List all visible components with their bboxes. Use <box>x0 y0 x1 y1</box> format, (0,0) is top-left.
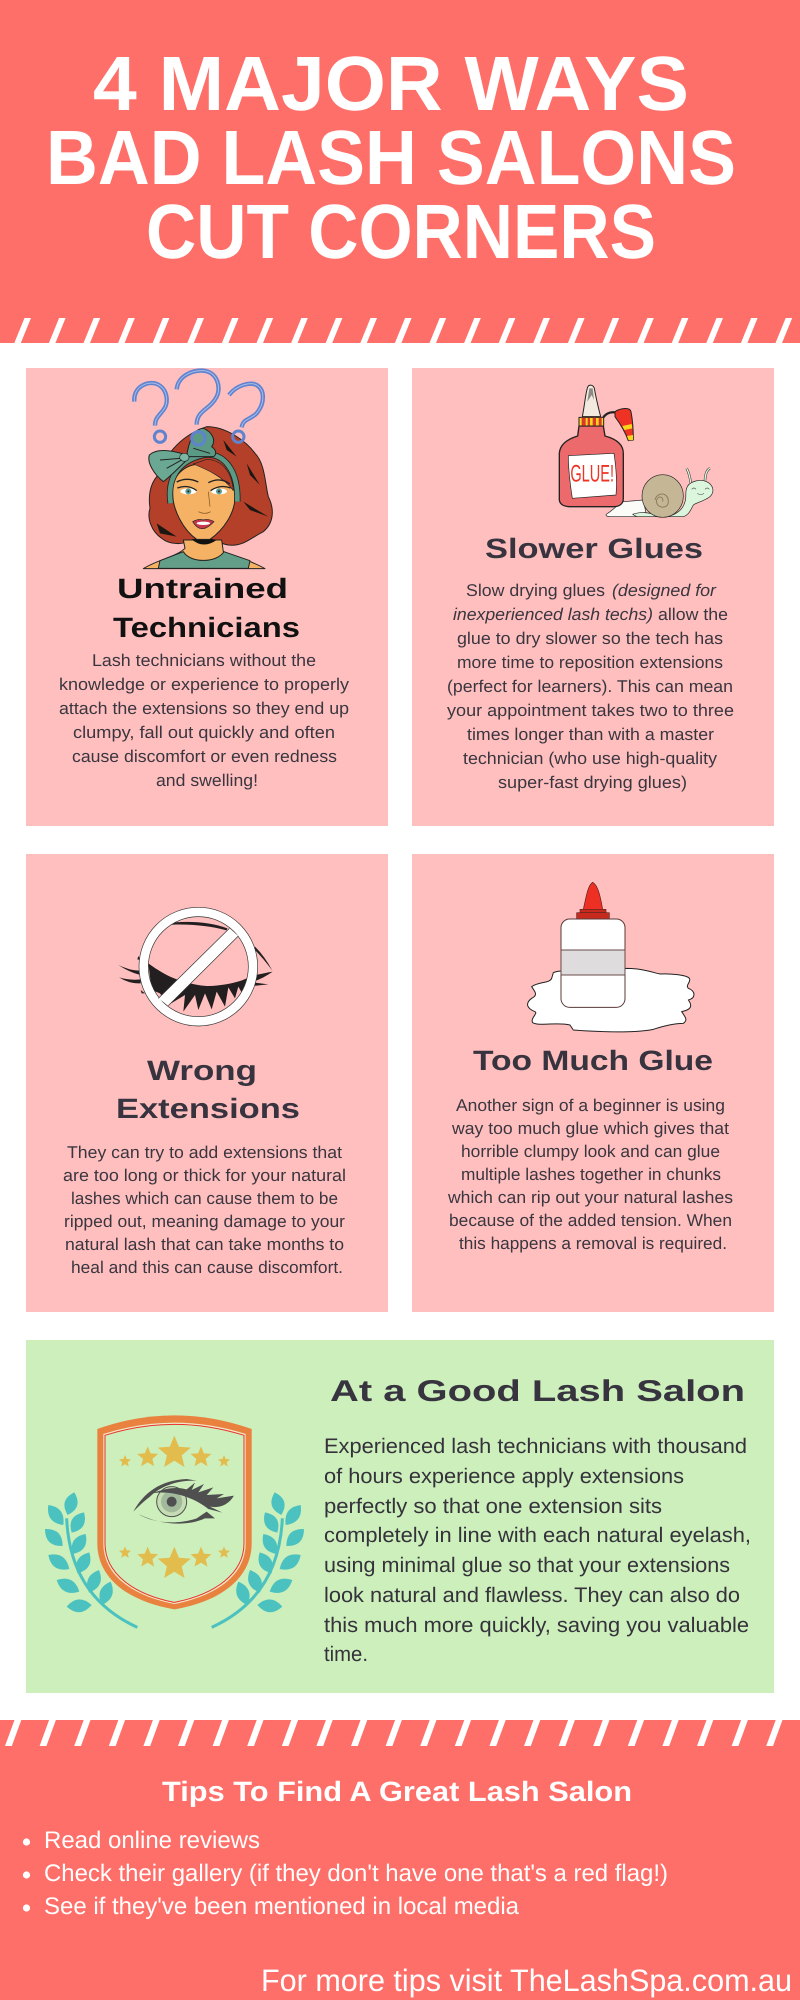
icon: glue bottle and snail: GLUE! <box>570 460 614 487</box>
text: untrained technicians: cause discomfort or even redness <box>72 747 337 766</box>
text: more tips link: For more tips visit TheLashSpa.com.au <box>261 1963 792 1998</box>
panel: wrong extensions <box>26 854 388 1312</box>
text: slower glues: times longer than with a master <box>467 725 714 744</box>
text: slower glues: (perfect for learners). This can mean <box>447 677 733 696</box>
heading: slower glues: Slower Glues <box>485 533 703 564</box>
icon: left laurel <box>45 1492 137 1627</box>
text: untrained technicians: Lash technicians without the <box>92 651 316 670</box>
text: slower glues: Slow drying glues <box>466 581 605 600</box>
header banner <box>0 0 800 343</box>
text: untrained technicians: attach the extensions so they end up <box>59 699 349 718</box>
icon: glue bottle and snail <box>559 385 713 517</box>
icon: shield badge with eye and laurels <box>45 1415 304 1627</box>
text: slower glues <box>447 581 734 792</box>
heading: untrained technicians <box>113 573 300 643</box>
title: BAD LASH SALONS <box>46 115 736 201</box>
text: slower glues: allow the <box>658 605 728 624</box>
heading: tips: Tips To Find A Great Lash Salon <box>162 1776 632 1807</box>
text: wrong extensions: ripped out, meaning damage to your <box>64 1212 345 1231</box>
text: untrained technicians <box>59 651 350 790</box>
text: slower glues: super-fast drying glues) <box>498 773 687 792</box>
text: wrong extensions: natural lash that can take months to <box>65 1235 344 1254</box>
text: wrong extensions <box>63 1143 346 1277</box>
list: tips <box>23 1827 668 1920</box>
text: too much glue: because of the added tension. When <box>449 1211 732 1230</box>
text: slower glues: your appointment takes two to three <box>447 701 734 720</box>
text: untrained technicians: knowledge or experience to properly <box>59 675 350 694</box>
heading: wrong extensions: Extensions <box>116 1093 300 1124</box>
text: at a good lash salon: of hours experience apply extensions <box>324 1465 684 1488</box>
text: too much glue: way too much glue which gives that <box>451 1119 729 1138</box>
text: at a good lash salon: completely in line with each natural eyelash, <box>324 1524 751 1547</box>
panel: untrained technicians <box>26 368 388 826</box>
title: 4 MAJOR WAYS <box>93 41 689 127</box>
text: slower glues: glue to dry slower so the tech has <box>457 629 723 648</box>
text: too much glue: which can rip out your natural lashes <box>447 1188 733 1207</box>
panel: too much glue <box>412 854 774 1312</box>
text: at a good lash salon <box>324 1435 751 1666</box>
text: wrong extensions: are too long or thick for your natural <box>63 1166 346 1185</box>
text: slower glues: technician (who use high-quality <box>463 749 718 768</box>
text: slower glues: inexperienced lash techs) <box>453 605 653 624</box>
text: at a good lash salon: using minimal glue so that your extensions <box>324 1554 730 1577</box>
list: tips: See if they've been mentioned in local media <box>44 1893 520 1920</box>
heading: at a good lash salon: At a Good Lash Salon <box>330 1375 745 1408</box>
panel: slower glues <box>412 368 774 826</box>
text: untrained technicians: and swelling! <box>156 771 258 790</box>
text: at a good lash salon: Experienced lash technicians with thousand <box>324 1435 747 1458</box>
text: wrong extensions: heal and this can cause discomfort. <box>71 1258 343 1277</box>
heading: too much glue: Too Much Glue <box>473 1045 713 1076</box>
list: tips: Read online reviews <box>44 1827 260 1854</box>
text: too much glue <box>447 1096 733 1253</box>
text: slower glues: more time to reposition extensions <box>457 653 723 672</box>
icon: crossed-out eyelash <box>118 907 273 1026</box>
heading: untrained technicians: Untrained <box>117 573 288 604</box>
text: untrained technicians: clumpy, fall out quickly and often <box>73 723 335 742</box>
text: too much glue: Another sign of a beginner is using <box>456 1096 725 1115</box>
panel: at a good lash salon <box>26 1340 774 1693</box>
heading: untrained technicians: Technicians <box>113 612 300 643</box>
text: too much glue: horrible clumpy look and can glue <box>461 1142 720 1161</box>
footer banner <box>0 1720 800 2000</box>
text: wrong extensions: They can try to add extensions that <box>67 1143 342 1162</box>
title: CUT CORNERS <box>146 189 656 275</box>
list: tips: Check their gallery (if they don't have one that's a red flag!) <box>44 1860 668 1887</box>
text: too much glue: multiple lashes together in chunks <box>461 1165 721 1184</box>
icon: confused woman with question marks <box>134 371 272 569</box>
icon: right laurel <box>212 1492 304 1627</box>
text: too much glue: this happens a removal is required. <box>459 1234 727 1253</box>
heading: wrong extensions <box>116 1055 300 1124</box>
text: at a good lash salon: time. <box>324 1643 368 1666</box>
text: at a good lash salon: look natural and flawless. They can also do <box>324 1584 740 1607</box>
text: at a good lash salon: perfectly so that one extension sits <box>324 1495 662 1518</box>
text: slower glues: (designed for <box>612 581 717 600</box>
text: at a good lash salon: this much more quickly, saving you valuable <box>324 1614 749 1637</box>
title <box>46 41 736 275</box>
text: wrong extensions: lashes which can cause them to be <box>71 1189 338 1208</box>
heading: wrong extensions: Wrong <box>147 1055 257 1086</box>
icon: glue bottle on puddle <box>528 882 694 1032</box>
